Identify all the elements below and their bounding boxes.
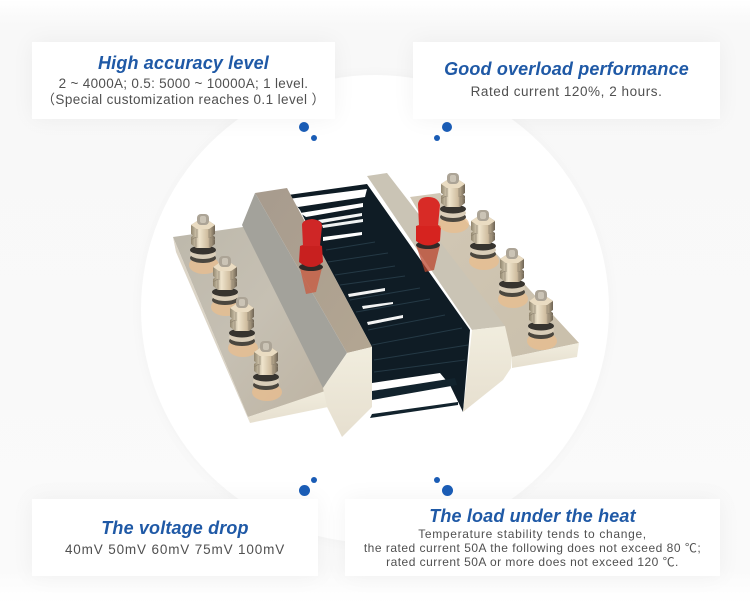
connector dots: top right xyxy=(434,122,452,141)
left red terminal xyxy=(299,219,323,294)
callout: high accuracy level xyxy=(32,42,335,119)
description xyxy=(364,527,701,569)
description: 40mV 50mV 60mV 75mV 100mV xyxy=(65,542,285,557)
left base plate xyxy=(173,226,330,423)
right ridge block xyxy=(367,173,512,412)
description: the rated current 50A the following does not exceed 80 ℃; xyxy=(364,541,701,555)
right base plate xyxy=(410,193,579,368)
right bolts xyxy=(439,173,557,350)
callout: the load under the heat xyxy=(345,499,720,576)
resistor core: dark blades xyxy=(288,184,470,418)
connector dots: bottom right xyxy=(434,477,453,496)
connector dots: top left xyxy=(299,122,317,141)
heading: The voltage drop xyxy=(101,518,249,538)
description: Temperature stability tends to change, xyxy=(418,527,647,541)
connector dots: bottom left xyxy=(299,477,317,496)
description: rated current 50A or more does not exceed 120 ℃. xyxy=(386,555,679,569)
white center circle xyxy=(141,75,609,543)
description: Rated current 120%, 2 hours. xyxy=(471,84,662,99)
callout: the voltage drop xyxy=(32,499,318,576)
left ridge block xyxy=(242,188,372,437)
description: （Special customization reaches 0.1 level ） xyxy=(42,92,325,106)
right red terminal xyxy=(416,197,441,272)
heading: High accuracy level xyxy=(98,53,269,73)
description xyxy=(42,76,325,107)
heading: Good overload performance xyxy=(444,59,689,79)
description: 2 ~ 4000A; 0.5: 5000 ~ 10000A; 1 level. xyxy=(59,76,308,91)
heading: The load under the heat xyxy=(429,506,636,526)
callout: good overload performance xyxy=(413,42,720,119)
left bolts xyxy=(189,214,282,401)
